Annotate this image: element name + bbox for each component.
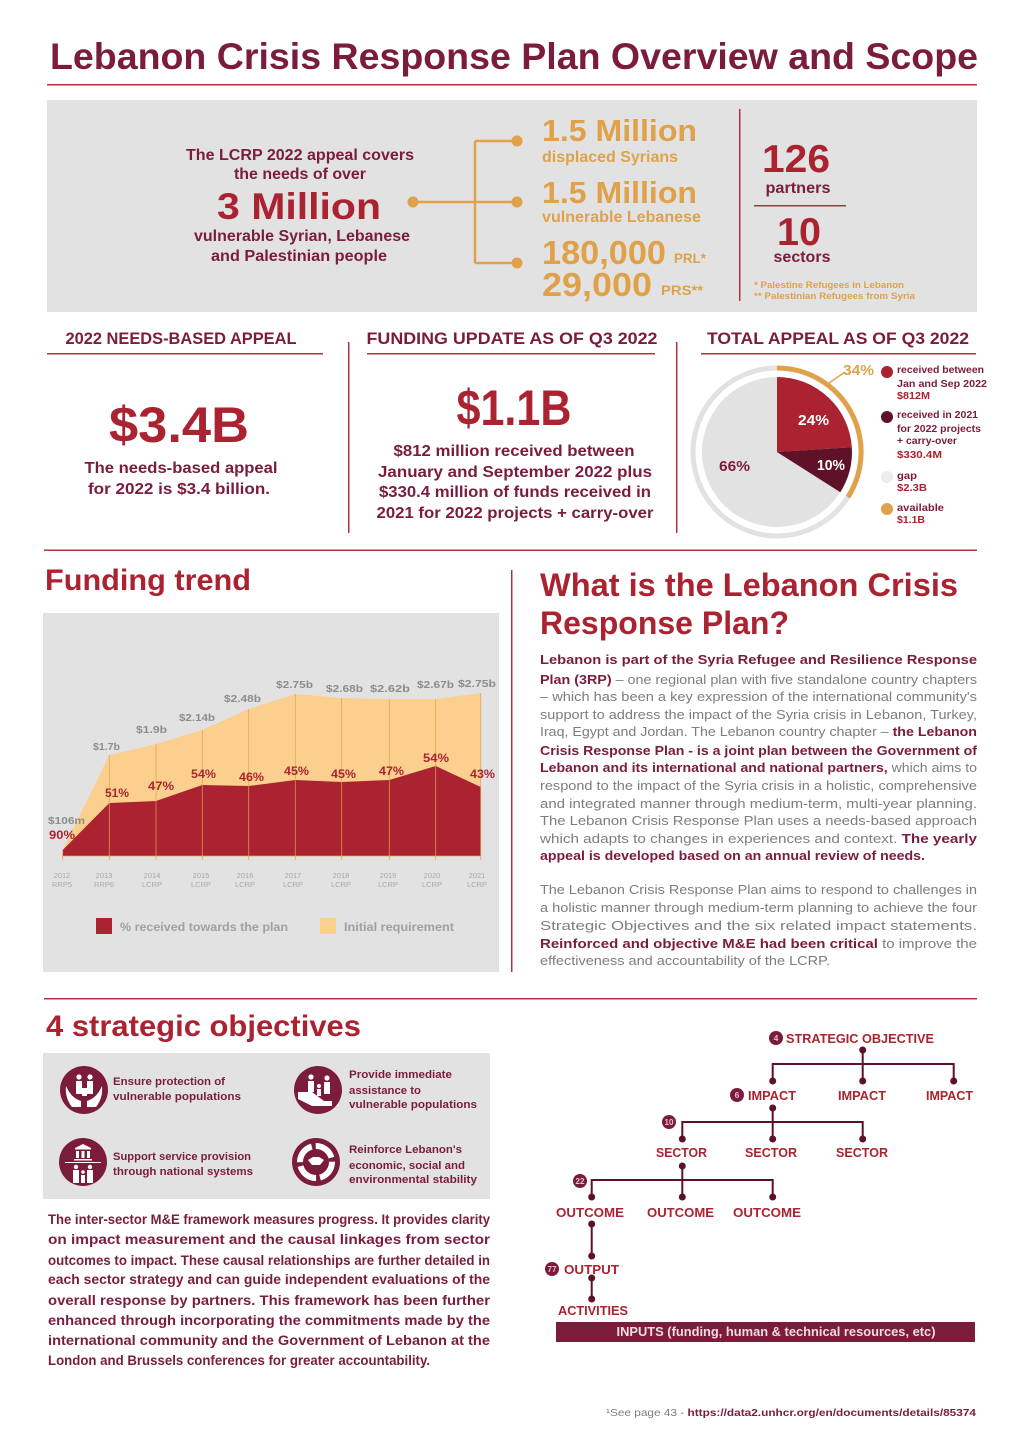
- text block: population breakdown: 1.5 Million: [542, 113, 697, 148]
- footnotes: ** Palestinian Refugees from Syria: [754, 291, 916, 301]
- chart labels: percent received: 45%: [284, 766, 309, 778]
- text block: LCRP description: Plan (3RP) – one regional plan with five standalone country chapters: [540, 672, 978, 687]
- text block: population breakdown: PRS**: [661, 282, 704, 298]
- pie legend: Jan and Sep 2022: [897, 379, 987, 390]
- panel: funding update: $812 million received between: [394, 443, 634, 460]
- diagram: results hierarchy: [545, 1031, 975, 1342]
- chart labels: requirement values: $106m: [48, 815, 85, 827]
- text block: M&E framework: London and Brussels conferences for greater accountability.: [48, 1353, 430, 1368]
- text block: population breakdown: 180,000: [542, 234, 666, 271]
- node labels: IMPACT: [748, 1088, 796, 1103]
- text block: LCRP description: Crisis Response Plan - is a joint plan between the Government of: [540, 743, 978, 758]
- panel: funding update: $1.1B: [456, 380, 572, 436]
- text block: 3 million people: the needs of over: [234, 166, 366, 183]
- chart labels: years: 2018: [333, 871, 349, 880]
- text block: 3 million people: and Palestinian people: [211, 248, 387, 265]
- text block: M&E framework: The inter-sector M&E framework measures progress. It provides clarity: [48, 1212, 490, 1227]
- text block: M&E framework: on impact measurement and the causal linkages from sector: [48, 1232, 491, 1247]
- objective: immediate assistance: assistance to: [349, 1085, 421, 1097]
- chart labels: requirement values: $1.9b: [136, 724, 167, 736]
- text block: M&E framework: each sector strategy and can guide independent evaluations of the: [48, 1272, 490, 1287]
- node labels: IMPACT: [838, 1088, 886, 1103]
- chart labels: years: 2017: [285, 871, 301, 880]
- pie legend: $812M: [897, 391, 930, 402]
- chart labels: years: 2019: [380, 871, 396, 880]
- chart labels: requirement values: $2.75b: [458, 678, 496, 690]
- objective: national systems: [59, 1138, 253, 1186]
- text block: partners and sectors: sectors: [774, 249, 830, 266]
- objective: immediate assistance: [294, 1066, 477, 1114]
- objective: stability: Reinforce Lebanon's: [349, 1144, 462, 1156]
- text block: LCRP description: – which has been a key expression of the international community's: [540, 689, 978, 704]
- pie chart: 24%: [798, 412, 829, 429]
- chart labels: percent received: 43%: [470, 769, 495, 781]
- count badges: 6: [735, 1090, 740, 1100]
- text block: 3 million people: vulnerable Syrian, Lebanese: [194, 228, 410, 245]
- text block: LCRP description: a holistic manner through medium-term planning to achieve the four: [540, 900, 978, 915]
- node labels: OUTPUT: [564, 1262, 619, 1277]
- panel: needs-based appeal: 2022 NEEDS-BASED APPEAL: [66, 329, 296, 348]
- chart labels: requirement values: $2.75b: [276, 679, 313, 691]
- chart legend: [96, 918, 454, 934]
- chart labels: years: LCRP: [378, 880, 398, 889]
- text block: M&E framework: [48, 1212, 491, 1368]
- inputs bar: [556, 1322, 975, 1342]
- text block: LCRP description: which adapts to changes in experiences and context. The yearly: [539, 831, 978, 846]
- footnotes: * Palestine Refugees in Lebanon: [754, 280, 904, 290]
- node labels: STRATEGIC OBJECTIVE: [786, 1031, 934, 1046]
- text block: LCRP description: Lebanon and its international and national partners, which aims to: [540, 760, 977, 775]
- text block: 3 million people: 3 Million: [217, 186, 381, 227]
- chart labels: percent received: 51%: [105, 788, 129, 800]
- objective: protection: vulnerable populations: [113, 1091, 241, 1103]
- node labels: SECTOR: [836, 1145, 889, 1160]
- text block: M&E framework: outcomes to impact. These causal relationships are further detailed in: [48, 1253, 490, 1268]
- text block: LCRP description: The Lebanon Crisis Response Plan aims to respond to challenges in: [540, 882, 977, 897]
- text block: partners and sectors: [754, 138, 846, 266]
- count badges: 4: [774, 1033, 779, 1043]
- text block: LCRP description: The Lebanon Crisis Response Plan uses a needs-based approach: [540, 813, 977, 828]
- node labels: SECTOR: [656, 1145, 708, 1160]
- chart labels: years: 2015: [193, 871, 209, 880]
- chart labels: requirement values: $1.7b: [93, 741, 120, 753]
- chart labels: percent received: 45%: [331, 769, 356, 781]
- pie chart: 34%: [843, 362, 874, 379]
- footnote: source: ¹See page 43 - https://data2.unhcr.org/en/documents/details/85374: [606, 1407, 976, 1419]
- chart labels: percent received: 54%: [191, 769, 216, 781]
- chart labels: years: LCRP: [422, 880, 442, 889]
- text block: 3 million people: The LCRP 2022 appeal covers: [186, 147, 414, 164]
- chart labels: requirement values: $2.62b: [370, 683, 410, 695]
- text block: LCRP description: Lebanon is part of the Syria Refugee and Resilience Response: [540, 652, 977, 667]
- node labels: IMPACT: [926, 1088, 973, 1103]
- heading: what is the LCRP: What is the Lebanon Crisis: [540, 567, 958, 603]
- text block: M&E framework: overall response by partners. This framework has been further: [48, 1293, 491, 1308]
- pie chart: 66%: [719, 458, 750, 475]
- text block: LCRP description: and integrated manner through medium-term, multi-year planning.: [540, 796, 977, 811]
- footnotes: [754, 280, 916, 301]
- objective: protection: [60, 1066, 241, 1114]
- node labels: [556, 1031, 973, 1318]
- count badges: 10: [665, 1118, 674, 1127]
- text block: population breakdown: vulnerable Lebanese: [542, 209, 701, 226]
- chart labels: requirement values: $2.67b: [417, 679, 454, 691]
- text block: partners and sectors: partners: [766, 180, 830, 197]
- objective: immediate assistance: vulnerable populations: [349, 1099, 477, 1111]
- pie chart: [693, 362, 874, 536]
- panel: funding update: FUNDING UPDATE AS OF Q3 2022: [366, 329, 658, 348]
- chart labels: years: LCRP: [331, 880, 351, 889]
- panel: needs-based appeal: for 2022 is $3.4 billion.: [88, 481, 270, 498]
- text block: LCRP description: appeal is developed based on an annual review of needs.: [540, 848, 925, 863]
- objective: protection: Ensure protection of: [113, 1076, 225, 1088]
- pie legend: + carry-over: [897, 436, 957, 447]
- count badges: [545, 1031, 783, 1276]
- chart legend: % received towards the plan: [120, 920, 288, 934]
- text block: LCRP description: respond to the impact of the Syria crisis in a holistic, comprehensive: [540, 778, 977, 793]
- heading: what is the LCRP: [540, 567, 958, 641]
- pie legend: $1.1B: [897, 515, 925, 526]
- pie legend: $2.3B: [897, 483, 927, 494]
- area: initial requirement: [63, 693, 481, 856]
- chart labels: years: LCRP: [283, 880, 303, 889]
- text block: LCRP description: Reinforced and objective M&E had been critical to improve the: [540, 936, 977, 951]
- text block: population breakdown: [542, 113, 707, 303]
- chart labels: requirement values: $2.48b: [224, 693, 261, 705]
- chart labels: requirement values: $2.14b: [179, 712, 215, 724]
- chart labels: percent received: 46%: [239, 772, 264, 784]
- objective: stability: economic, social and: [349, 1160, 465, 1172]
- count badges: 22: [576, 1177, 585, 1186]
- chart labels: requirement values: [48, 678, 496, 827]
- text block: LCRP description: [539, 652, 978, 968]
- text block: M&E framework: international community and the Government of Lebanon at the: [48, 1333, 491, 1348]
- text block: population breakdown: PRL*: [674, 250, 707, 266]
- pie legend: gap: [897, 471, 917, 482]
- pie legend: $330.4M: [897, 450, 942, 461]
- chart labels: years: [52, 871, 487, 889]
- panel: funding trend chart: [43, 613, 499, 972]
- panel: funding update: January and September 2022 plus: [378, 464, 652, 481]
- panel: total appeal: [693, 329, 987, 536]
- chart labels: years: RRP6: [94, 880, 114, 889]
- title: Lebanon Crisis Response Plan Overview and Scope: [50, 36, 978, 77]
- heading: 4 strategic objectives: 4 strategic objectives: [46, 1010, 361, 1043]
- chart labels: years: 2013: [96, 871, 112, 880]
- pie legend: received in 2021: [897, 410, 978, 421]
- panel: needs-based appeal: The needs-based appeal: [84, 460, 278, 477]
- node labels: SECTOR: [745, 1145, 798, 1160]
- pie legend: available: [897, 503, 944, 514]
- pie chart: 10%: [817, 457, 845, 474]
- node labels: ACTIVITIES: [558, 1303, 628, 1318]
- objective: stability: [292, 1138, 478, 1186]
- connector lines: [592, 1050, 954, 1299]
- text block: 3 million people: [186, 147, 414, 265]
- panel: funding update: $330.4 million of funds received in: [379, 484, 651, 501]
- chart labels: years: RRP5: [52, 880, 72, 889]
- chart labels: years: LCRP: [235, 880, 255, 889]
- chart labels: percent received: 47%: [379, 766, 404, 778]
- heading: funding trend: Funding trend: [45, 564, 251, 597]
- text block: LCRP description: support to address the impact of the Syria crisis in Lebanon, Turkey,: [540, 707, 977, 722]
- connector: breakdown bracket: [408, 136, 522, 268]
- text block: LCRP description: effectiveness and accountability of the LCRP.: [540, 953, 830, 968]
- text block: partners and sectors: 10: [777, 211, 821, 254]
- node labels: OUTCOME: [733, 1205, 801, 1220]
- text block: population breakdown: 29,000: [542, 266, 652, 303]
- text block: LCRP description: Strategic Objectives and the six related impact statements.: [540, 918, 977, 933]
- text block: M&E framework: enhanced through incorporating the commitments made by the: [48, 1313, 491, 1328]
- count badges: 77: [548, 1265, 557, 1274]
- objective: national systems: through national systems: [113, 1166, 253, 1178]
- panel: needs-based appeal: [47, 329, 323, 498]
- chart labels: percent received: 90%: [49, 830, 75, 842]
- pie legend: for 2022 projects: [897, 424, 981, 435]
- panel: funding update: [366, 329, 658, 522]
- chart labels: percent received: [49, 753, 495, 842]
- node labels: OUTCOME: [556, 1205, 624, 1220]
- chart labels: years: 2012: [54, 871, 70, 880]
- text block: population breakdown: 1.5 Million: [542, 175, 697, 210]
- chart labels: years: 2021: [469, 871, 485, 880]
- chart labels: years: 2016: [237, 871, 253, 880]
- pie legend: received between: [897, 365, 984, 376]
- panel: funding update: 2021 for 2022 projects + carry-over: [376, 505, 654, 522]
- panel: needs-based appeal: $3.4B: [109, 397, 249, 453]
- objective: national systems: Support service provision: [113, 1151, 251, 1163]
- inputs bar: INPUTS (funding, human & technical resources, etc): [616, 1325, 936, 1339]
- chart legend: Initial requirement: [344, 920, 454, 934]
- chart labels: requirement values: $2.68b: [326, 683, 363, 695]
- objective: immediate assistance: Provide immediate: [349, 1069, 452, 1081]
- heading: what is the LCRP: Response Plan?: [540, 605, 789, 641]
- objective: stability: environmental stability: [349, 1174, 478, 1186]
- chart labels: years: 2014: [144, 871, 160, 880]
- text block: LCRP description: Iraq, Egypt and Jordan. The Lebanon country chapter – the Lebanon: [540, 724, 977, 739]
- panel: objectives: [43, 1053, 490, 1199]
- panel: total appeal: TOTAL APPEAL AS OF Q3 2022: [707, 329, 969, 348]
- chart labels: percent received: 47%: [148, 781, 174, 793]
- chart labels: years: LCRP: [467, 880, 487, 889]
- text block: population breakdown: displaced Syrians: [542, 149, 678, 166]
- chart labels: percent received: 54%: [423, 753, 449, 765]
- connector dots: [588, 1046, 957, 1302]
- chart labels: years: LCRP: [142, 880, 162, 889]
- text block: partners and sectors: 126: [762, 138, 830, 181]
- chart labels: years: 2020: [424, 871, 440, 880]
- node labels: OUTCOME: [647, 1205, 714, 1220]
- panel: scope overview: [47, 100, 977, 312]
- chart labels: years: LCRP: [191, 880, 211, 889]
- area: percent received: [63, 766, 481, 856]
- pie legend: [881, 365, 987, 526]
